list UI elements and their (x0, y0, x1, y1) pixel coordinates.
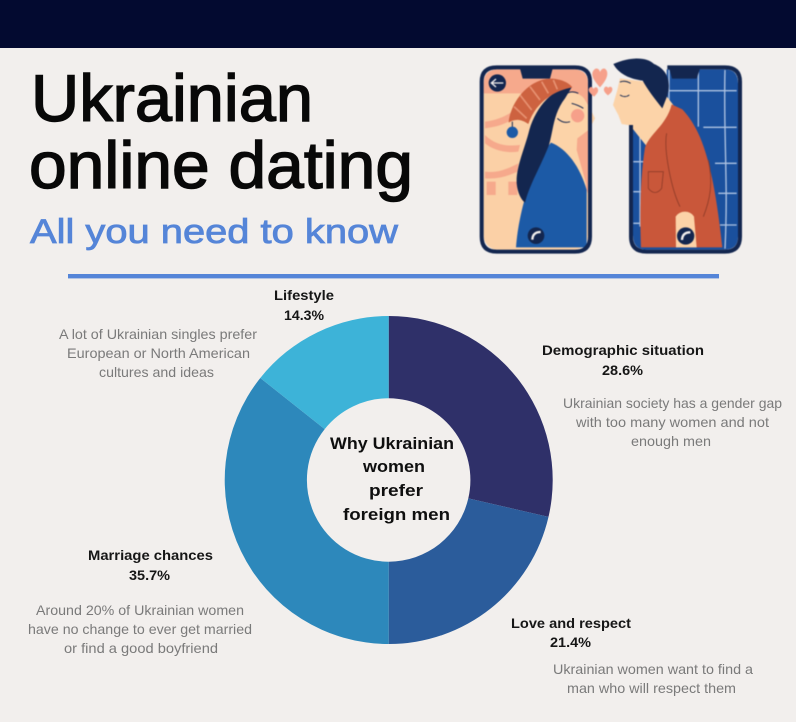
header divider (68, 274, 719, 278)
love and respect description: Ukrainian women want to find a (553, 661, 753, 677)
donut centre label: Why Ukrainian (330, 434, 454, 453)
marriage chances description: Around 20% of Ukrainian women (36, 602, 244, 618)
lifestyle label (274, 287, 334, 323)
segment: lifestyle 14.3% (260, 316, 389, 429)
lifestyle description (59, 326, 257, 380)
lifestyle description: cultures and ideas (99, 364, 214, 380)
subtitle: All you need to know (30, 213, 399, 251)
lifestyle label: Lifestyle (274, 287, 334, 303)
love and respect label (511, 615, 631, 650)
love and respect label: Love and respect (511, 615, 631, 631)
top banner (0, 0, 796, 48)
right phone with man (613, 58, 740, 252)
demographic situation description: enough men (631, 433, 711, 449)
segment: love and respect 21.4% (389, 498, 548, 644)
love and respect description: man who will respect them (567, 680, 736, 696)
donut centre label: foreign men (343, 505, 450, 524)
marriage chances description: or find a good boyfriend (64, 640, 218, 656)
illustration: couple kissing through phones (482, 58, 740, 252)
marriage chances description (28, 602, 252, 656)
donut centre label: women (362, 457, 425, 476)
hearts (589, 68, 612, 97)
demographic situation description: with too many women and not (575, 414, 769, 430)
segment: marriage chances 35.7% (225, 378, 389, 644)
demographic situation description (563, 395, 782, 449)
marriage chances label (88, 547, 213, 583)
title: Ukrainian (31, 61, 313, 135)
demographic situation label: Demographic situation (542, 342, 704, 358)
lifestyle description: A lot of Ukrainian singles prefer (59, 326, 257, 342)
marriage chances label: 35.7% (129, 567, 171, 583)
demographic situation description: Ukrainian society has a gender gap (563, 395, 782, 411)
lifestyle label: 14.3% (284, 307, 325, 323)
love and respect description (553, 661, 753, 696)
love and respect label: 21.4% (550, 634, 592, 650)
donut centre label: prefer (369, 481, 423, 500)
title: online dating (29, 128, 413, 202)
donut centre label (330, 434, 454, 524)
left phone with woman (482, 67, 595, 252)
donut chart (225, 316, 553, 644)
segment: demographic situation 28.6% (389, 316, 553, 517)
demographic situation label: 28.6% (602, 362, 644, 378)
marriage chances label: Marriage chances (88, 547, 213, 563)
marriage chances description: have no change to ever get married (28, 621, 252, 637)
demographic situation label (542, 342, 704, 378)
title (29, 61, 413, 202)
lifestyle description: European or North American (67, 345, 250, 361)
